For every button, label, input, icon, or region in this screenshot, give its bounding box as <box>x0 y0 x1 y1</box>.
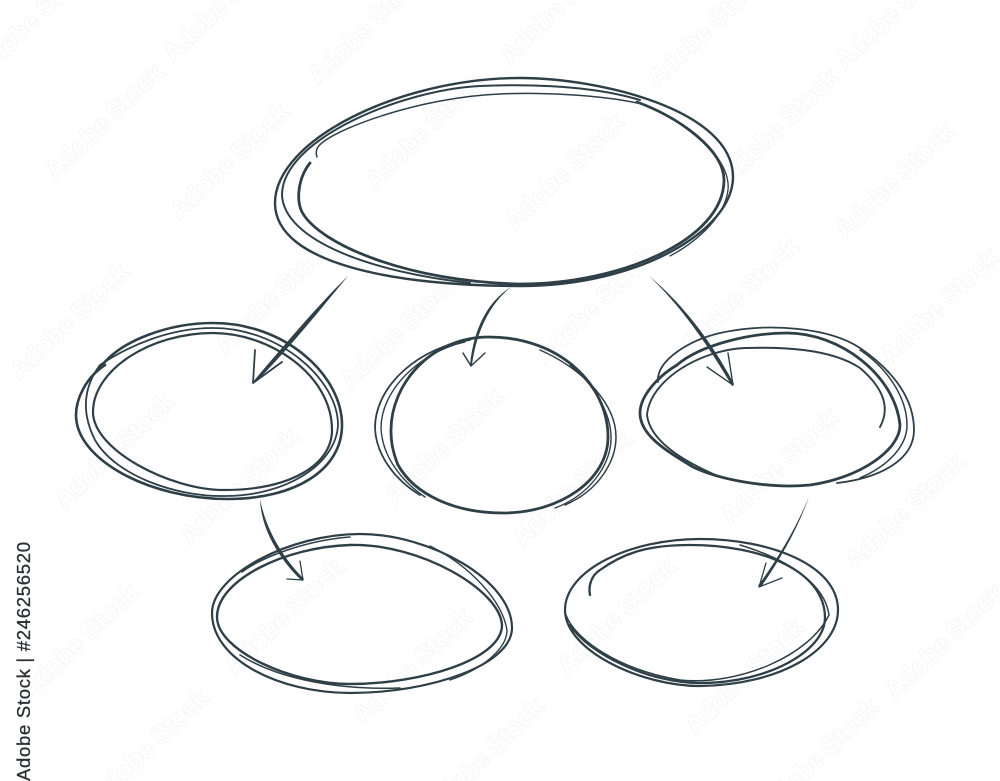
watermark pattern: Adobe Stock <box>675 233 804 359</box>
watermark pattern: Adobe Stock <box>50 388 179 514</box>
watermark pattern: Adobe Stock <box>210 233 339 359</box>
watermark pattern: Adobe Stock <box>840 448 969 574</box>
watermark pattern: Adobe Stock <box>175 423 304 549</box>
watermark pattern: Adobe Stock <box>165 98 294 224</box>
watermark pattern: Adobe Stock <box>40 58 169 184</box>
watermark pattern: Adobe Stock <box>500 108 629 234</box>
arrow: top to right <box>649 276 734 386</box>
watermark pattern: Adobe Stock <box>680 613 809 739</box>
lower left oval node <box>212 534 512 693</box>
arrow: left to lower left <box>260 499 304 581</box>
watermark pattern: Adobe Stock <box>15 578 144 704</box>
watermark pattern: Adobe Stock <box>335 268 464 394</box>
watermark pattern: Adobe Stock <box>530 243 659 369</box>
lower right oval node <box>565 539 838 686</box>
watermark pattern: Adobe Stock <box>5 258 134 384</box>
watermark pattern: Adobe Stock <box>508 425 637 551</box>
watermark pattern: Adobe Stock <box>715 403 844 529</box>
vertical stock credit: Adobe Stock | #246256520 <box>13 542 34 781</box>
arrow: top to middle <box>463 287 511 366</box>
watermark pattern: Adobe Stock <box>220 553 349 679</box>
left oval node <box>76 323 342 499</box>
arrow: right to lower right <box>758 497 809 587</box>
top oval node <box>275 78 733 286</box>
watermark pattern: Adobe Stock <box>380 383 509 509</box>
watermark pattern: Adobe Stock <box>360 68 489 194</box>
watermark pattern: Adobe Stock <box>830 118 959 244</box>
watermark pattern: Adobe Stock <box>552 553 681 679</box>
middle circle node <box>375 337 616 513</box>
arrow: top to left <box>252 276 348 383</box>
watermark pattern: Adobe Stock <box>715 63 844 189</box>
right oval node <box>640 328 914 486</box>
watermark pattern: Adobe Stock <box>348 603 477 729</box>
